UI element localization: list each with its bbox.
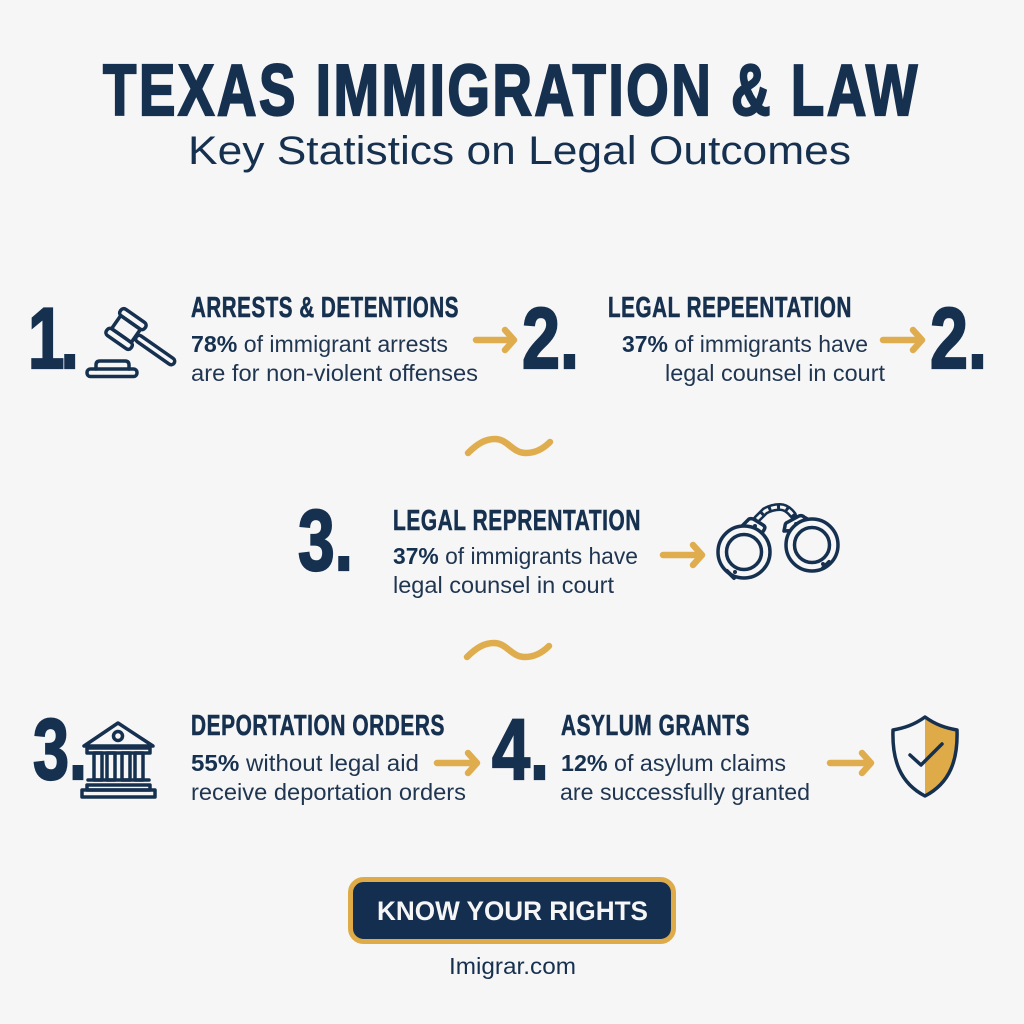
arrow	[883, 330, 922, 350]
statistic text: 78% of immigrant arrests	[191, 331, 448, 357]
icon: courthouse	[82, 723, 155, 797]
statistic text: 37% of immigrants have	[393, 543, 638, 569]
heading: ASYLUM GRANTS	[561, 710, 750, 742]
wave divider	[468, 439, 550, 453]
button: know your rights	[350, 880, 674, 942]
number 3: 3.	[33, 702, 87, 798]
arrow	[830, 753, 871, 773]
icon: shield	[893, 717, 957, 796]
wave divider	[467, 643, 549, 657]
description text: legal counsel in court	[393, 572, 615, 598]
heading: LEGAL REPEENTATION	[608, 292, 852, 324]
panel: deportation orders	[33, 702, 477, 805]
number 2: 2.	[522, 291, 579, 387]
arrow	[663, 545, 702, 565]
icon: handcuffs	[718, 507, 838, 578]
heading: ARRESTS & DETENTIONS	[191, 292, 459, 324]
number 2 right: 2.	[930, 291, 987, 387]
heading: LEGAL REPRENTATION	[393, 505, 641, 537]
website: Imigrar.com	[449, 953, 576, 979]
panel: asylum grants	[492, 702, 957, 805]
description text: receive deportation orders	[191, 779, 466, 805]
arrow	[476, 330, 514, 350]
subtitle: Key Statistics on Legal Outcomes	[188, 129, 851, 173]
description text: legal counsel in court	[665, 360, 886, 386]
button: know your rights: KNOW YOUR RIGHTS	[377, 896, 648, 926]
panel: arrests and detentions	[28, 291, 514, 387]
number 3: 3.	[298, 493, 353, 589]
statistic text: 37% of immigrants have	[622, 331, 868, 357]
arrow	[437, 753, 477, 773]
panel: legal representation top	[522, 291, 987, 387]
description text: are successfully granted	[560, 779, 810, 805]
heading: DEPORTATION ORDERS	[191, 710, 445, 742]
number 1: 1.	[28, 291, 75, 387]
number 4: 4.	[492, 702, 549, 798]
statistic text: 55% without legal aid	[191, 750, 419, 776]
description text: are for non-violent offenses	[191, 360, 478, 386]
icon: gavel	[87, 307, 184, 376]
panel: legal representation middle	[298, 493, 838, 598]
statistic text: 12% of asylum claims	[561, 750, 786, 776]
